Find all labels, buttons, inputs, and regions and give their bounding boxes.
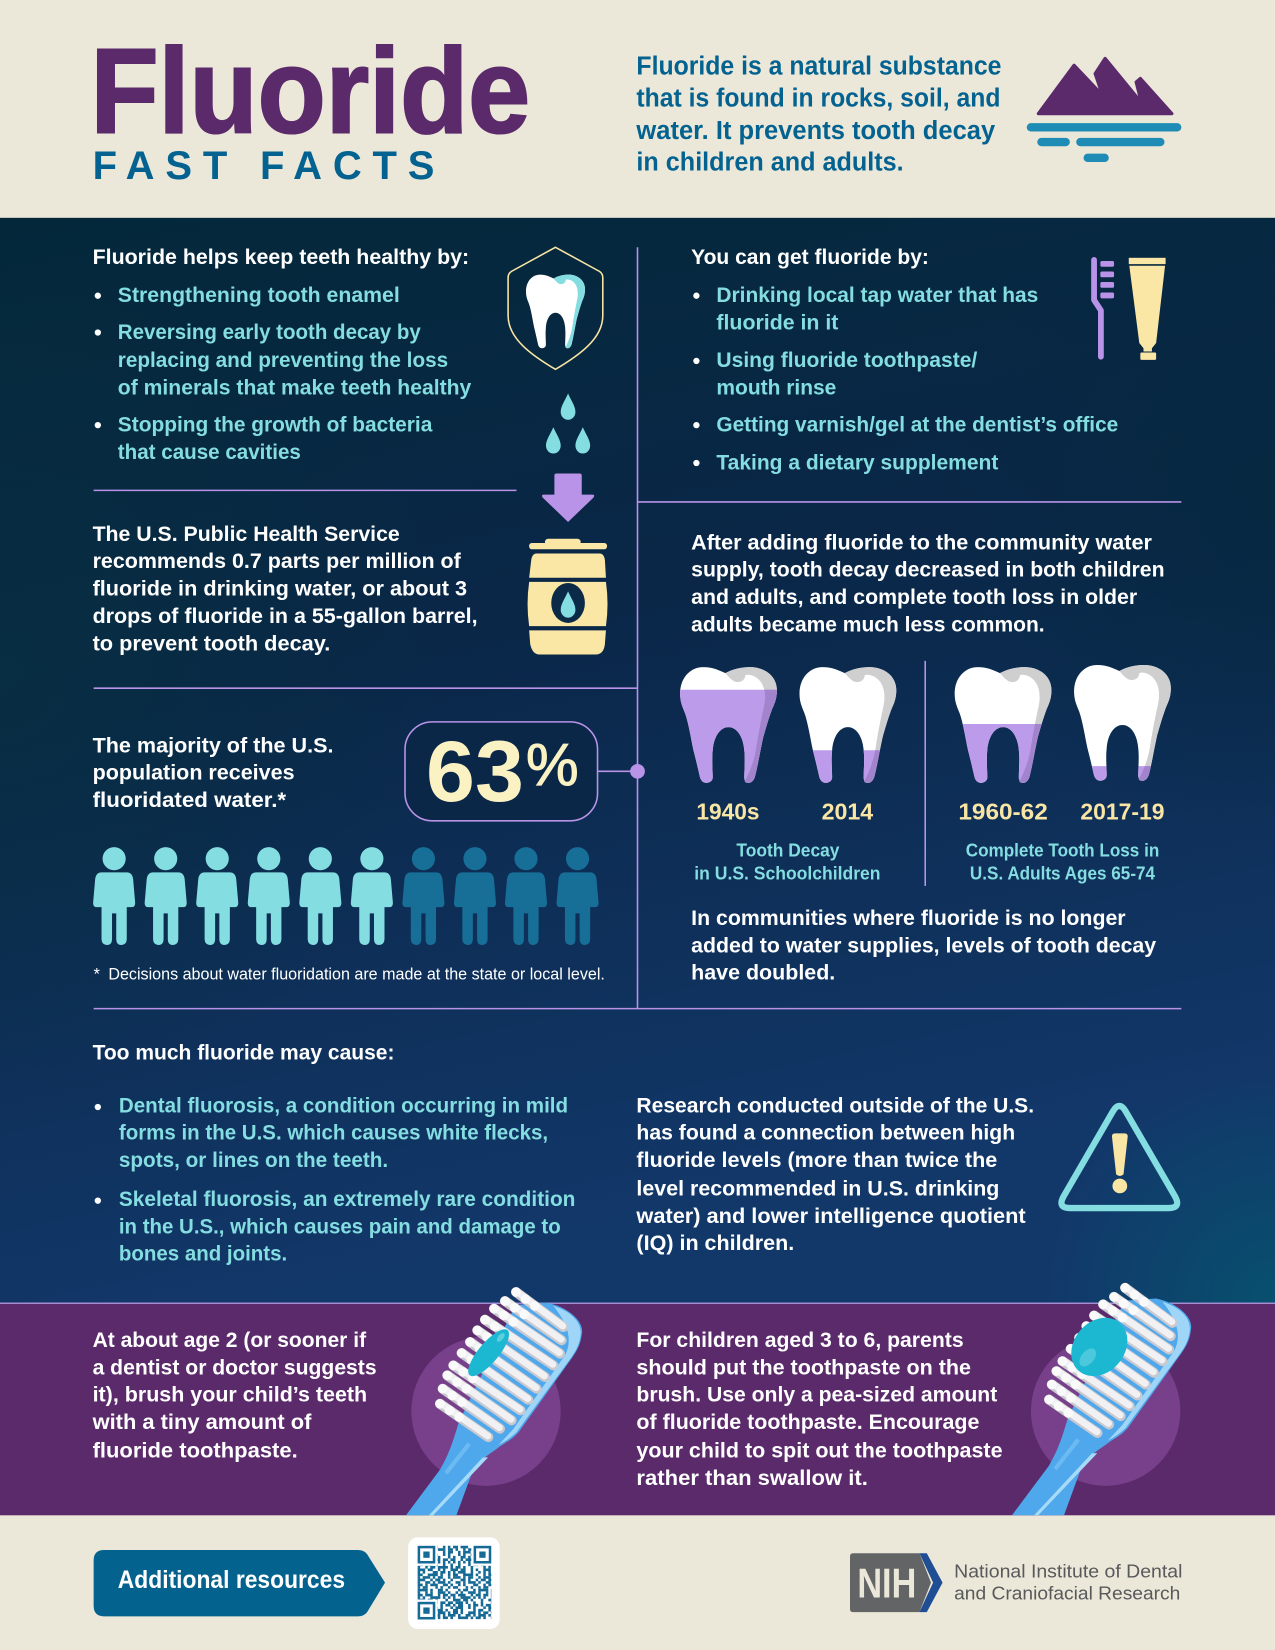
bullet list: fluoride in it [716,309,838,334]
bullet list: forms in the U.S. which causes white flecks, [119,1120,548,1145]
organization name [954,1560,1182,1603]
text: tooth decay doubled: have doubled. [691,960,835,985]
text: after adding fluoride: and adults, and complete tooth loss in older [691,584,1138,609]
title: Fluoride [90,23,530,159]
intro text: that is found in rocks, soil, and [636,82,1000,112]
intro text: water. It prevents tooth decay [635,115,996,145]
text: majority receives fluoridated water: The majority of the U.S. [93,732,333,757]
intro text: in children and adults. [636,146,904,176]
text: children aged 3 to 6: For children aged 3 to 6, parents [636,1327,964,1352]
bullet list: mouth rinse [716,375,836,400]
text: recommended fluoride level: recommends 0.7 parts per million of [93,548,462,573]
text: research outside the U.S.: water) and lower intelligence quotient [635,1203,1026,1228]
button: additional resources: Additional resources [118,1566,345,1594]
logo: NIH: NIH [857,1559,916,1606]
heading: You can get fluoride by: [691,244,929,269]
chart: tooth decay in schoolchildren: in U.S. Schoolchildren [694,863,881,884]
text: tooth decay doubled [691,905,1156,985]
bullet list: Stopping the growth of bacteria [118,411,433,436]
text: research outside the U.S.: level recommended in U.S. drinking [636,1175,999,1200]
chart: complete tooth loss in older adults [955,665,1171,884]
text: research outside the U.S.: Research conducted outside of the U.S. [636,1092,1034,1117]
callout: 63 percent: 63 [426,724,524,820]
footnote: * [94,966,101,984]
header title block [90,23,530,188]
icon: toothbrush and toothpaste tube [1094,258,1166,360]
text: recommended fluoride level: drops of fluoride in a 55-gallon barrel, [93,603,478,628]
icon: toothbrush with pea-sized toothpaste [1003,1287,1191,1528]
icon: tooth in shield [508,247,603,369]
tooth: 2014 [800,667,896,783]
chart: complete tooth loss in older adults: Complete Tooth Loss in [966,840,1159,861]
bullet list: Strengthening tooth enamel [118,282,400,307]
text: majority receives fluoridated water: fluoridated water.* [93,787,287,812]
bullet list: Using fluoride toothpaste/ [716,347,977,372]
chart: complete tooth loss in older adults: U.S. Adults Ages 65-74 [970,863,1156,884]
callout: 63 percent [405,722,645,821]
bullet list: that cause cavities [118,439,301,464]
QR code [408,1537,500,1629]
callout: 63 percent: % [526,733,579,798]
bullet list: of minerals that make teeth healthy [118,375,471,400]
text: research outside the U.S.: fluoride levels (more than twice the [636,1147,997,1172]
text: after adding fluoride [691,529,1165,636]
heading: Fluoride helps keep teeth healthy by: [93,244,469,269]
bullet list: replacing and preventing the loss [118,347,448,372]
panel: how fluoride keeps teeth healthy [93,244,471,464]
chart: tooth decay in schoolchildren [680,667,896,884]
text: majority receives fluoridated water [93,732,333,812]
text: after adding fluoride: adults became much less common. [691,611,1045,636]
subtitle: FAST FACTS [93,144,434,188]
text: recommended fluoride level: fluoride in drinking water, or about 3 [93,576,467,601]
bullet list: Drinking local tap water that has [716,282,1038,307]
bullet list [693,282,1118,474]
organization name: and Craniofacial Research [954,1582,1180,1603]
text: after adding fluoride: supply, tooth decay decreased in both children [691,557,1165,582]
bullet list [95,282,471,464]
text: children aged 3 to 6: brush. Use only a pea-sized amount [636,1382,997,1407]
text: research outside the U.S.: (IQ) in children. [636,1230,794,1255]
bullet list: Getting varnish/gel at the dentist’s office [716,411,1118,436]
tooth: 2017-19 [1074,665,1171,781]
icon: toothbrush with tiny smear of toothpaste [406,1287,582,1516]
text: tooth decay doubled: added to water supplies, levels of tooth decay [691,932,1156,957]
bullet list: Dental fluorosis, a condition occurring in mild [119,1092,568,1117]
icon: warning triangle [1061,1106,1177,1208]
intro text [635,51,1001,176]
bullet list: bones and joints. [119,1241,287,1266]
text: recommended fluoride level: The U.S. Public Health Service [93,521,400,546]
tooth: 1940s [680,667,777,783]
organization name: National Institute of Dental [954,1560,1182,1581]
text: research outside the U.S. [635,1092,1034,1255]
button: additional resources [94,1550,385,1616]
text: brushing at about age 2: fluoride toothpaste. [93,1437,298,1462]
icon: barrel with drop [528,539,608,655]
chart: complete tooth loss in older adults: 1960-62 [958,799,1048,825]
text: after adding fluoride: After adding fluoride to the community water [691,529,1153,554]
icon: three water drops [546,394,590,454]
chart: tooth decay in schoolchildren: Tooth Decay [736,840,840,861]
logo: NIH [850,1553,943,1612]
bullet list: spots, or lines on the teeth. [119,1147,388,1172]
text: children aged 3 to 6: of fluoride toothpaste. Encourage [636,1409,979,1434]
footnote: Decisions about water fluoridation are made at the state or local level. [108,966,605,984]
pictogram: 6 of 10 people [93,847,599,945]
text: children aged 3 to 6: your child to spit out the toothpaste [636,1437,1003,1462]
text: research outside the U.S.: has found a connection between high [636,1120,1015,1145]
tooth: 1960-62 [955,667,1051,783]
text: brushing at about age 2: it), brush your child’s teeth [93,1382,367,1407]
intro text: Fluoride is a natural substance [636,51,1001,81]
chart: complete tooth loss in older adults: 2017-19 [1080,799,1165,825]
panel: how to get fluoride [691,244,1118,474]
text: brushing at about age 2: At about age 2 (or sooner if [93,1327,367,1352]
arrow: pointing down to barrel [542,474,594,522]
chart: tooth decay in schoolchildren: 2014 [822,799,873,825]
text: children aged 3 to 6: should put the toothpaste on the [636,1354,971,1379]
icon: mountains over water [1027,58,1181,162]
text: children aged 3 to 6: rather than swallow it. [636,1465,868,1490]
text: tooth decay doubled: In communities where fluoride is no longer [691,905,1126,930]
text: majority receives fluoridated water: population receives [93,760,295,785]
text: brushing at about age 2 [92,1327,377,1462]
heading: Too much fluoride may cause: [93,1040,394,1065]
panel: too much fluoride [93,1040,575,1266]
bullet list: Taking a dietary supplement [716,449,998,474]
chart: tooth decay in schoolchildren: 1940s [696,799,760,825]
bullet list [95,1092,575,1266]
purple band background [0,1303,1275,1515]
bullet list: Reversing early tooth decay by [118,319,421,344]
bullet list: in the U.S., which causes pain and damage to [119,1213,561,1238]
bullet list: Skeletal fluorosis, an extremely rare condition [119,1186,575,1211]
text: brushing at about age 2: with a tiny amount of [92,1409,312,1434]
text: children aged 3 to 6 [636,1327,1003,1490]
text: recommended fluoride level [93,521,478,655]
text: brushing at about age 2: a dentist or doctor suggests [93,1354,377,1379]
text: recommended fluoride level: to prevent tooth decay. [93,630,330,655]
dark main panel background [0,218,1275,1303]
